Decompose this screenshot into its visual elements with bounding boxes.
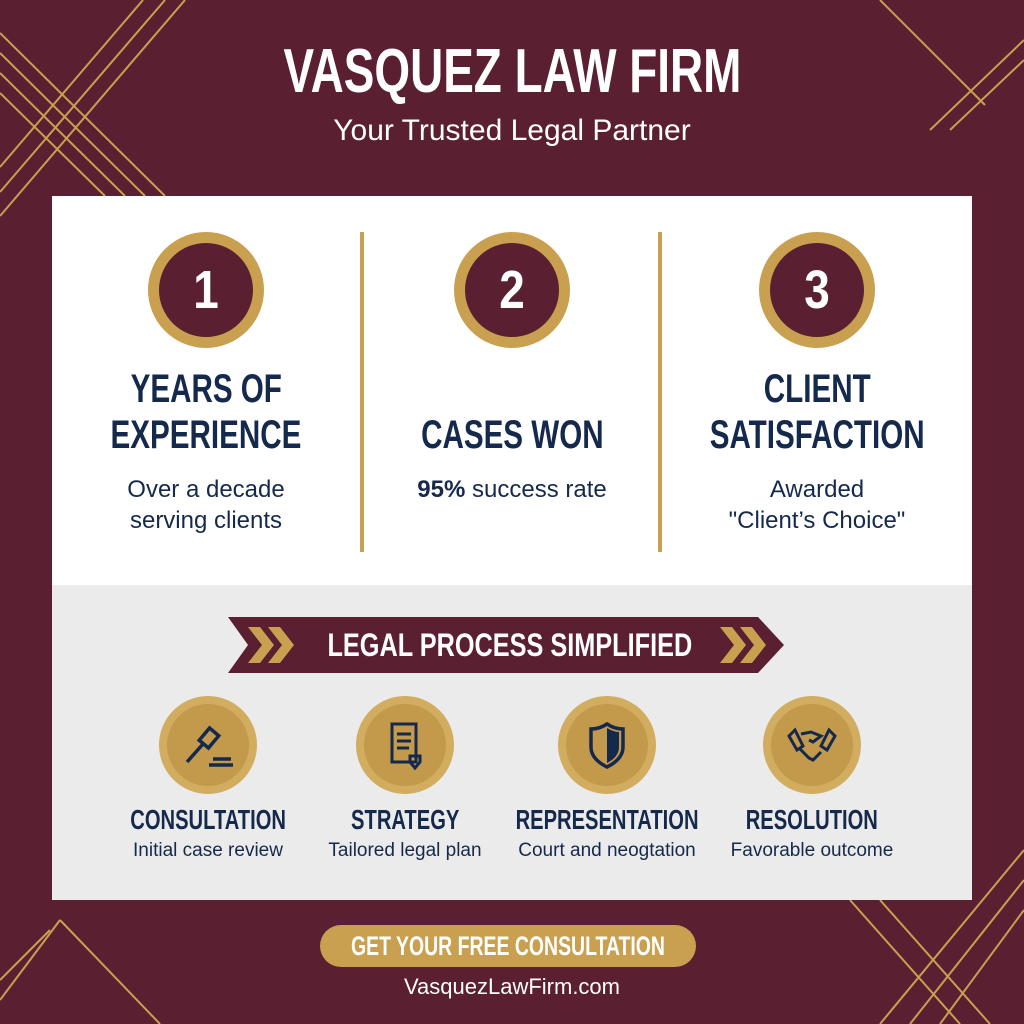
icon: number 1 [148,232,264,348]
step: strategy: Tailored legal plan [328,840,482,861]
heading: satisfaction [710,367,924,457]
text [127,476,285,534]
heading: years [111,367,301,457]
text: "Client’s Choice" [729,507,905,534]
CTA button: GET YOUR FREE CONSULTATION [351,930,665,960]
website URL: VasquezLawFirm.com [404,974,620,999]
text [729,476,905,534]
step: resolution: Favorable outcome [731,840,893,861]
step: strategy: STRATEGY [351,804,459,835]
step: resolution: RESOLUTION [746,804,878,835]
stat 1 [111,232,301,534]
CTA button [320,925,696,967]
step: consultation: Initial case review [133,840,283,861]
subtitle: Your Trusted Legal Partner [333,114,691,147]
heading: years: EXPERIENCE [111,413,301,457]
stat 2 [417,232,607,503]
icon: number 1: 1 [193,260,219,320]
banner: LEGAL PROCESS SIMPLIFIED [328,627,692,663]
text: serving clients [130,507,282,534]
step: strategy [328,696,482,861]
title: VASQUEZ LAW FIRM [283,37,741,106]
icon: shield [558,696,656,794]
step: representation: REPRESENTATION [516,804,698,835]
icon: handshake [763,696,861,794]
step: representation [516,696,698,861]
icon: number 2 [454,232,570,348]
text: Over a decade [127,476,285,503]
heading: cases won: CASES WON [421,413,603,457]
text: 95% success rate [417,476,607,503]
text: Awarded [770,476,864,503]
step: representation: Court and neogtation [518,840,696,861]
icon: gavel [159,696,257,794]
heading: satisfaction: SATISFACTION [710,413,924,457]
stat 3 [710,232,924,534]
step: resolution [731,696,893,861]
icon: number 2: 2 [499,260,525,320]
icon: document [356,696,454,794]
heading: satisfaction: CLIENT [764,367,870,411]
icon: number 3 [759,232,875,348]
heading: years: YEARS OF [130,367,282,411]
step: consultation [130,696,286,861]
banner [228,617,784,673]
icon: number 3: 3 [804,260,830,320]
step: consultation: CONSULTATION [130,804,286,835]
panel: stats [52,196,972,900]
